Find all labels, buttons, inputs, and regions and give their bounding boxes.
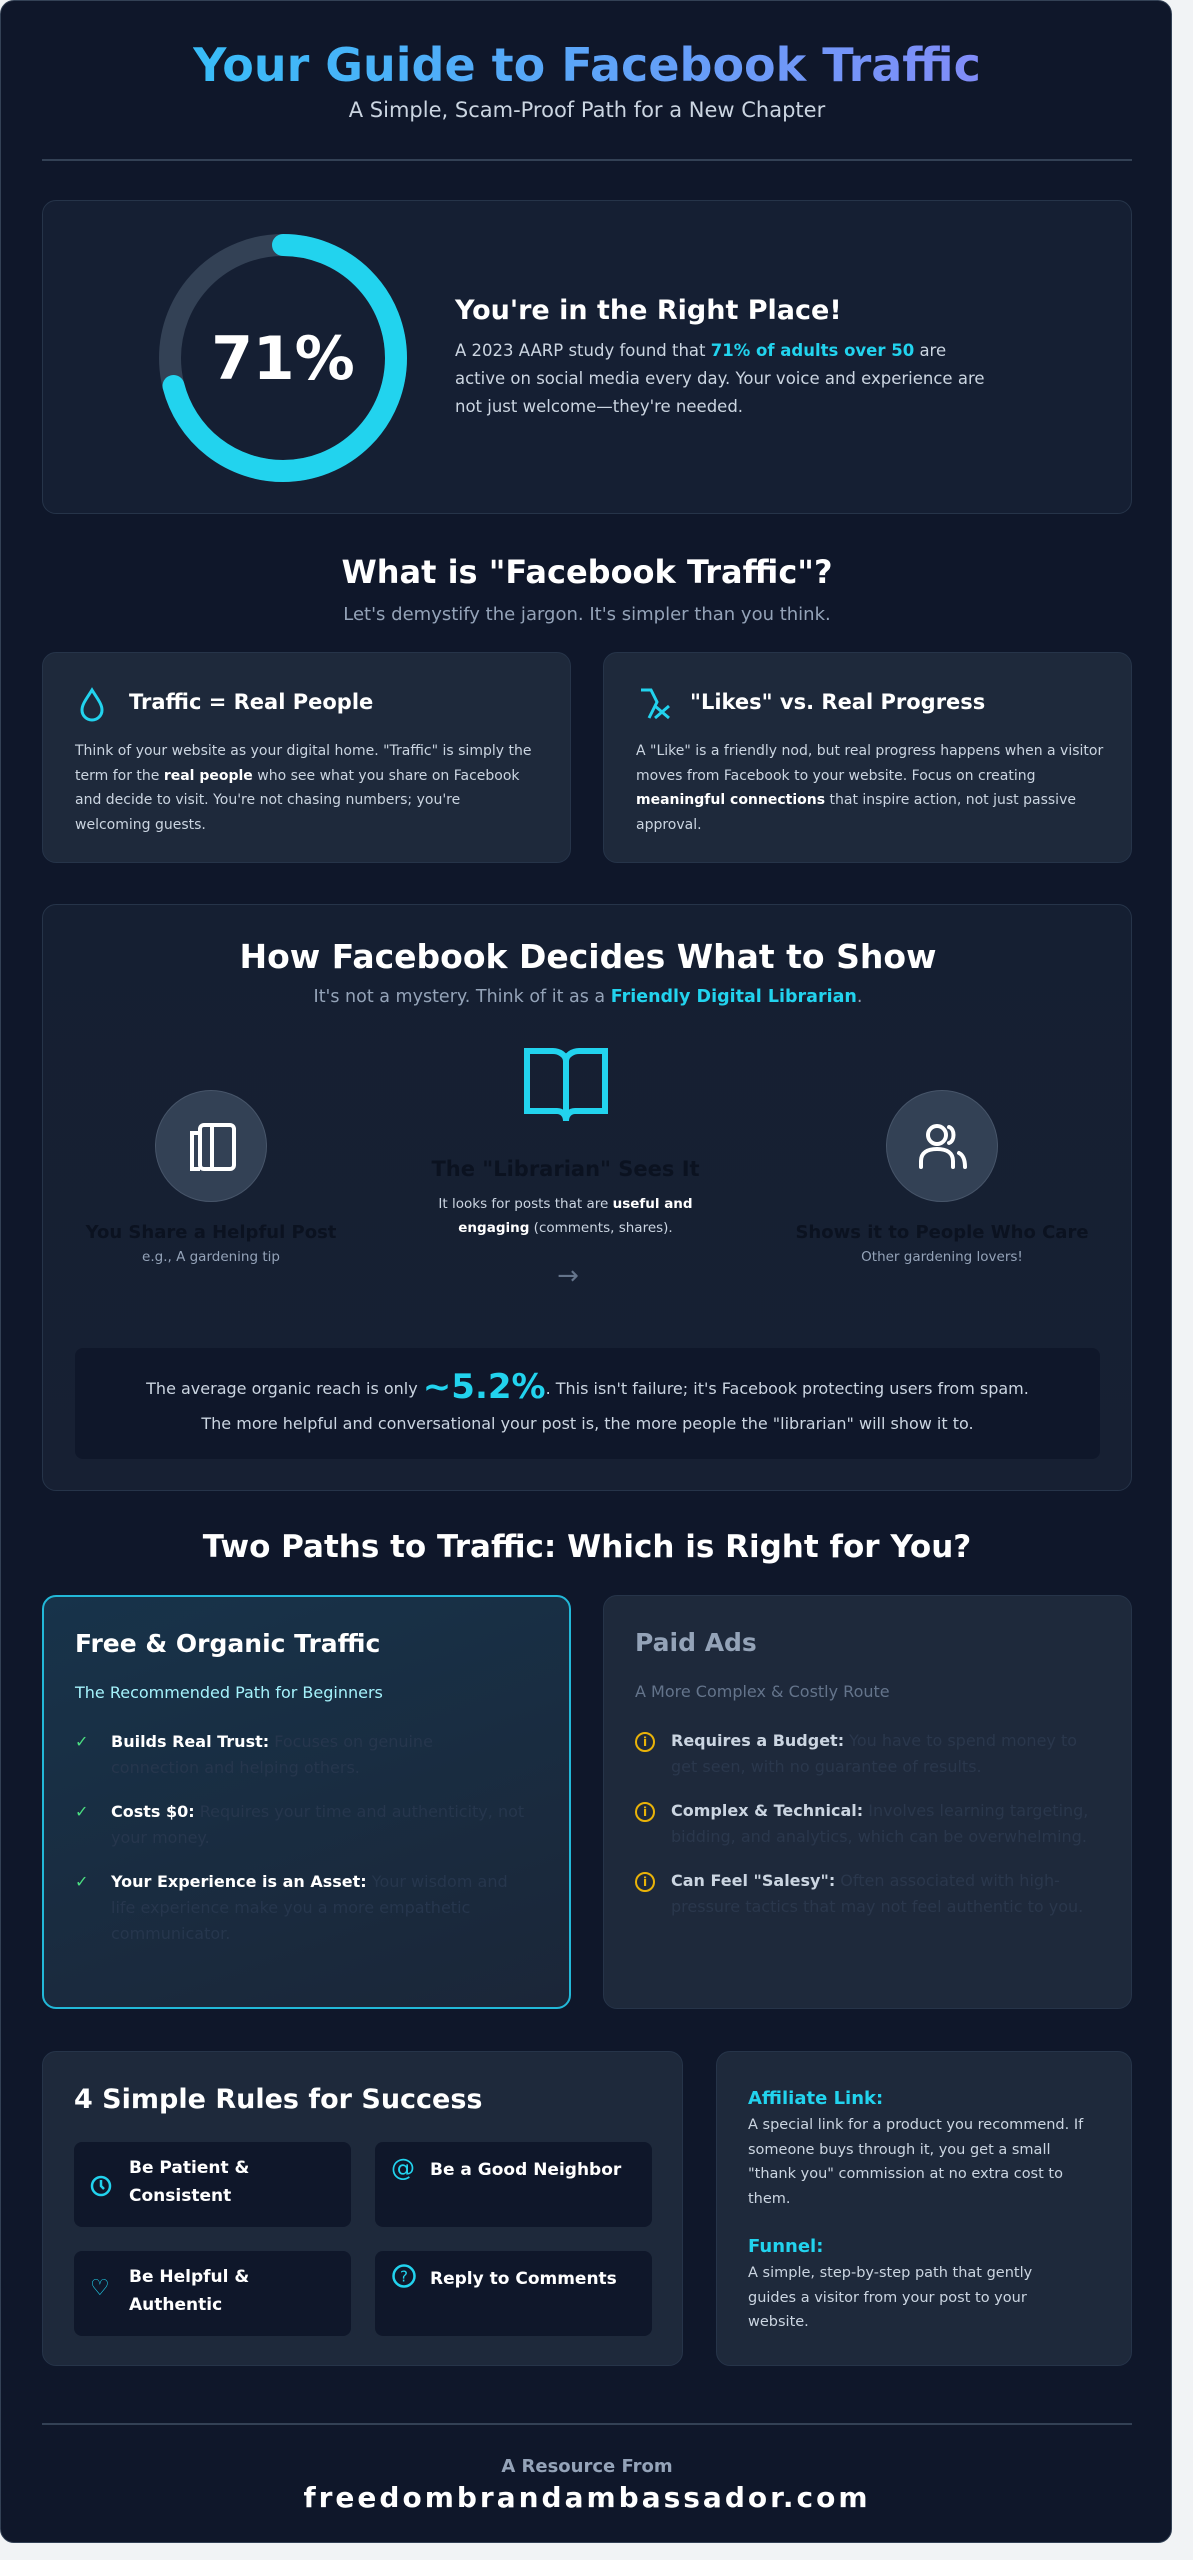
step: people: Other gardening lovers! xyxy=(861,1249,1023,1265)
rule: patient xyxy=(74,2142,351,2227)
term: affiliate: A special link for a product you recommend. If someone buys through it, you get a small "thank you" commission at no extra cost to them. xyxy=(748,2117,1083,2206)
icon: people xyxy=(886,1090,998,1202)
step: librarian xyxy=(431,1048,700,1236)
heading: right place: You're in the Right Place! xyxy=(455,295,842,326)
card title: "Likes" vs. Real Progress xyxy=(690,690,985,714)
footer: A Resource From xyxy=(501,2456,673,2477)
icon: drop xyxy=(80,687,104,722)
step: share: e.g., A gardening tip xyxy=(142,1249,280,1265)
footer: freedombrandambassador.com xyxy=(303,2481,871,2514)
rule: neighbor xyxy=(375,2142,652,2227)
rule: helpful: Be Helpful & xyxy=(129,2267,249,2287)
panel: likes xyxy=(603,652,1132,863)
heading: How Facebook Decides What to Show xyxy=(239,937,937,976)
donut chart: 71% xyxy=(211,324,355,394)
footer xyxy=(303,2456,871,2514)
panel: rules xyxy=(42,2051,683,2366)
subheading: It's not a mystery. Think of it as a Friendly Digital Librarian. xyxy=(314,987,862,1007)
title: Paid Ads xyxy=(635,1628,757,1657)
list: drawbacks: Complex & Technical: Involves learning targeting, bidding, and analytics, which can be overwhelming. xyxy=(671,1801,1088,1846)
panel: how facebook decides xyxy=(42,904,1132,1491)
step: people xyxy=(795,1090,1089,1265)
card title: Traffic = Real People xyxy=(129,690,373,714)
icon: arrow xyxy=(641,688,670,719)
callout: reach xyxy=(75,1348,1100,1459)
icon: book xyxy=(524,1048,608,1121)
term: funnel xyxy=(748,2236,1032,2330)
heading: two paths: Two Paths to Traffic: Which is Right for You? xyxy=(203,1529,971,1565)
step: librarian: It looks for posts that are useful and engaging (comments, shares). xyxy=(438,1196,693,1236)
list: drawbacks: i xyxy=(643,1875,647,1889)
list: benefits: Costs $0: Requires your time and authenticity, not your money. xyxy=(111,1802,524,1847)
rule: neighbor: Be a Good Neighbor xyxy=(430,2160,621,2180)
panel: organic xyxy=(42,1595,571,2009)
callout: reach: The more helpful and conversational your post is, the more people the "librarian" will show it to. xyxy=(201,1414,974,1433)
arrow: → xyxy=(557,1261,579,1291)
term: funnel: Funnel: xyxy=(748,2236,823,2257)
icon: post xyxy=(155,1090,267,1202)
rule: reply xyxy=(375,2251,652,2336)
card text: A "Like" is a friendly nod, but real progress happens when a visitor moves from Facebook to your website. Focus on creating meaningful connections that inspire action, not just passive approval. xyxy=(636,743,1103,832)
title: Free & Organic Traffic xyxy=(75,1629,380,1658)
term: funnel: A simple, step-by-step path that gently guides a visitor from your post to your website. xyxy=(748,2265,1032,2330)
callout: reach: The average organic reach is only ~5.2%. This isn't failure; it's Facebook protecting users from spam. xyxy=(146,1367,1029,1407)
list: benefits: Builds Real Trust: Focuses on genuine connection and helping others. xyxy=(111,1732,433,1777)
list: drawbacks: i xyxy=(643,1805,647,1819)
card text: Think of your website as your digital home. "Traffic" is simply the term for the real people who see what you share on Facebook and decide to visit. You're not chasing numbers; you're welcoming guests. xyxy=(75,743,531,832)
panel: stat xyxy=(42,200,1132,514)
subtitle: A More Complex & Costly Route xyxy=(635,1682,890,1701)
rule: reply: Reply to Comments xyxy=(430,2269,617,2289)
list: benefits: ✓ xyxy=(75,1802,88,1821)
rule: helpful xyxy=(74,2251,351,2336)
rule: helpful: ♡ xyxy=(90,2276,110,2301)
list: drawbacks xyxy=(635,1731,1088,1916)
title: Your Guide to Facebook Traffic xyxy=(193,38,981,92)
step: librarian: The "Librarian" Sees It xyxy=(431,1157,700,1181)
panel: paid xyxy=(603,1595,1132,2009)
term: affiliate: Affiliate Link: xyxy=(748,2088,883,2109)
list: drawbacks: Can Feel "Salesy": Often associated with high-pressure tactics that may not feel authentic to you. xyxy=(671,1871,1083,1916)
step: people: Shows it to People Who Care xyxy=(795,1222,1089,1243)
heading: what is: What is "Facebook Traffic"? xyxy=(341,553,833,591)
subtitle: The Recommended Path for Beginners xyxy=(75,1683,383,1702)
subtitle: A Simple, Scam-Proof Path for a New Chapter xyxy=(349,98,825,122)
step: share: You Share a Helpful Post xyxy=(86,1222,336,1243)
rule: helpful: Authentic xyxy=(129,2295,222,2315)
list: drawbacks: Requires a Budget: You have to spend money to get seen, with no guarantee of results. xyxy=(671,1731,1077,1776)
rule: reply: ? xyxy=(400,2268,408,2286)
rule: patient: Be Patient & xyxy=(129,2158,249,2178)
donut chart xyxy=(159,234,407,482)
text: study: A 2023 AARP study found that 71% of adults over 50 are active on social media every day. Your voice and experience are not just welcome—they're needed. xyxy=(455,341,985,416)
list: benefits xyxy=(75,1732,524,1943)
panel: traffic xyxy=(42,652,571,863)
list: drawbacks: i xyxy=(643,1735,647,1749)
panel: glossary xyxy=(716,2051,1132,2366)
heading: 4 Simple Rules for Success xyxy=(74,2084,483,2115)
subheading: Let's demystify the jargon. It's simpler than you think. xyxy=(343,604,831,625)
rule: patient: Consistent xyxy=(129,2186,231,2206)
rule: neighbor: @ xyxy=(391,2154,415,2182)
list: benefits: Your Experience is an Asset: Your wisdom and life experience make you a more empathetic communicator. xyxy=(111,1872,508,1943)
list: benefits: ✓ xyxy=(75,1872,88,1891)
list: benefits: ✓ xyxy=(75,1732,88,1751)
step: share xyxy=(86,1090,336,1265)
